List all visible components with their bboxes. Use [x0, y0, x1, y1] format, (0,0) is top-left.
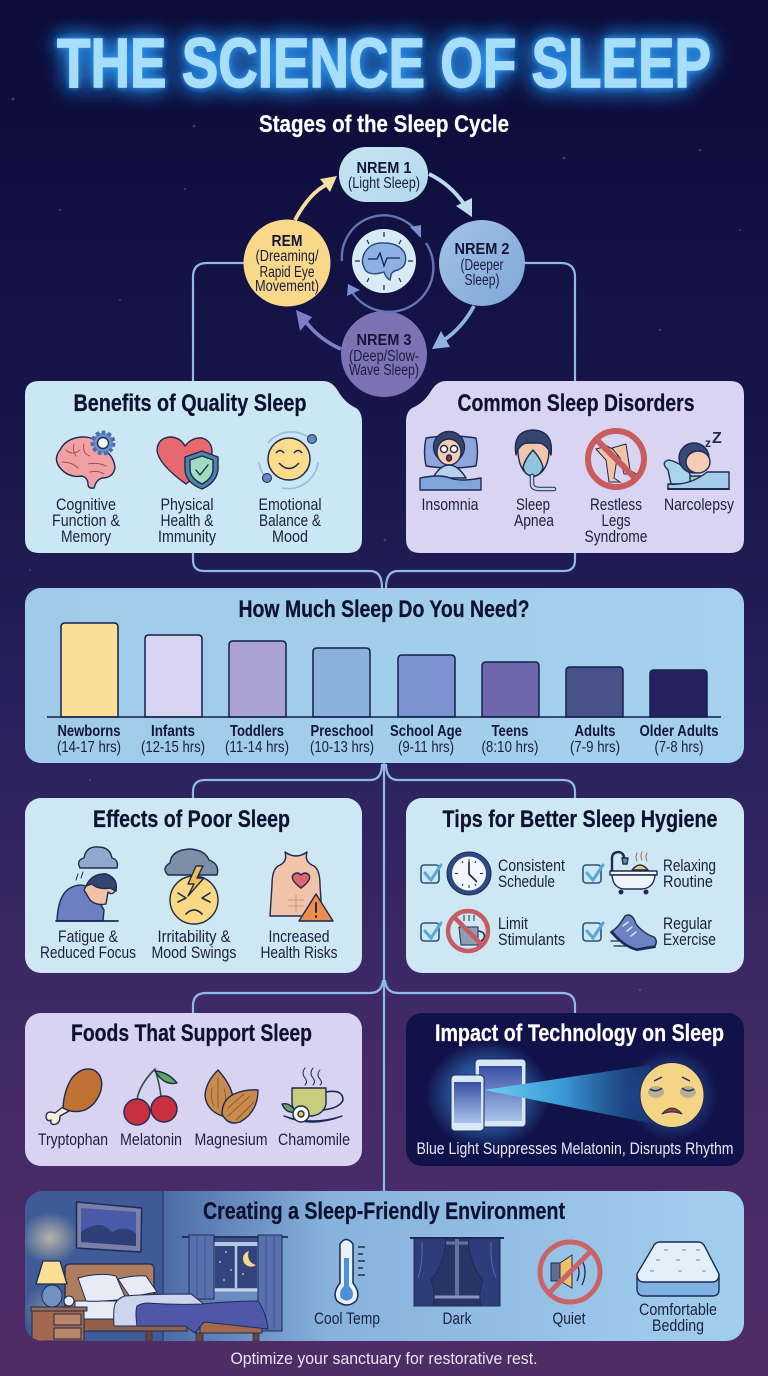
- heading: Creating a Sleep-Friendly Environment: [203, 1198, 565, 1225]
- node: nrem 1: [339, 147, 428, 202]
- bar label: toddlers: Toddlers: [230, 723, 284, 740]
- heading: Common Sleep Disorders: [458, 390, 694, 417]
- label: physical health and immunity: Immunity: [158, 528, 217, 546]
- bar label: preschool: [310, 723, 374, 756]
- label: consistent schedule: Schedule: [498, 873, 555, 891]
- bar label: adults: (7-9 hrs): [570, 739, 620, 756]
- label: increased health risks: Increased: [268, 928, 330, 946]
- label: comfortable bedding: [639, 1301, 717, 1335]
- connectors between panels: [193, 263, 575, 1191]
- icon: fatigued person under cloud: [56, 847, 118, 921]
- label: sleep apnea: Apnea: [514, 512, 555, 530]
- bar label: newborns: Newborns: [58, 723, 121, 740]
- label: physical health and immunity: [158, 496, 217, 546]
- bar label: school age: [390, 723, 462, 756]
- icon: tired face: [640, 1062, 704, 1128]
- label: tryptophan: Tryptophan: [38, 1131, 108, 1149]
- panel: tips for better sleep hygiene: [406, 798, 744, 973]
- panel: creating a sleep-friendly environment: [20, 1191, 744, 1341]
- bar label: infants: Infants: [151, 723, 195, 740]
- label: limit stimulants: [498, 915, 565, 949]
- bar chart: [47, 623, 721, 717]
- bar label: school age: (9-11 hrs): [398, 739, 454, 756]
- label: fatigue and reduced focus: [40, 928, 136, 962]
- bar label: preschool: Preschool: [310, 723, 374, 740]
- node: nrem 1: NREM 1: [356, 160, 412, 177]
- panel: benefits of quality sleep: [25, 381, 362, 553]
- icon: smiley with orbit: [259, 432, 318, 489]
- label: quiet: Quiet: [552, 1310, 586, 1328]
- bar label: preschool: (10-13 hrs): [310, 739, 374, 756]
- icon: tablet: [475, 1059, 526, 1127]
- label: consistent schedule: [498, 857, 565, 891]
- icon: phone: [451, 1075, 484, 1131]
- label: restless legs syndrome: Syndrome: [584, 528, 648, 546]
- panel: common sleep disorders: [406, 381, 744, 553]
- label: magnesium: Magnesium: [194, 1131, 268, 1149]
- label: increased health risks: [260, 928, 338, 962]
- icon: brain with gear: [56, 432, 115, 488]
- icon: sleep apnea mask: [515, 430, 554, 489]
- footer caption: Optimize your sanctuary for restorative rest.: [230, 1349, 538, 1368]
- node: nrem 3: (Deep/Slow-: [349, 348, 419, 365]
- bar label: newborns: (14-17 hrs): [57, 739, 121, 756]
- illustration: bedroom: [20, 1191, 288, 1341]
- icon: restless legs prohibited: [588, 431, 644, 487]
- label: physical health and immunity: Health &: [160, 512, 214, 530]
- label: irritability and mood swings: Mood Swings: [152, 944, 236, 962]
- bar label: toddlers: (11-14 hrs): [225, 739, 289, 756]
- label: melatonin: Melatonin: [120, 1131, 182, 1149]
- bar label: school age: School Age: [390, 723, 462, 740]
- label: emotional balance and mood: Balance &: [259, 512, 321, 530]
- icon: quiet no sound: [540, 1242, 600, 1302]
- bar label: older adults: Older Adults: [640, 723, 719, 740]
- label: cognitive function and memory: Memory: [61, 528, 112, 546]
- node: nrem 3: Wave Sleep): [349, 362, 419, 379]
- label: emotional balance and mood: Mood: [272, 528, 308, 546]
- icon: irritable face with storm: [165, 849, 218, 924]
- icon: no stimulants: [448, 911, 488, 951]
- node: rem: (Dreaming/: [256, 248, 319, 265]
- sleep cycle diagram: [244, 147, 525, 397]
- bar label: teens: [482, 723, 538, 756]
- label: comfortable bedding: Bedding: [652, 1317, 704, 1335]
- node: nrem 1: (Light Sleep): [348, 175, 420, 192]
- icon: thermometer: [335, 1240, 365, 1305]
- label: physical health and immunity: Physical: [160, 496, 214, 514]
- icon: cherries: [124, 1069, 177, 1125]
- bar label: adults: [570, 723, 620, 756]
- label: irritability and mood swings: [152, 928, 236, 962]
- label: relaxing routine: [663, 857, 716, 891]
- label: emotional balance and mood: Emotional: [258, 496, 322, 514]
- label: chamomile: Chamomile: [278, 1131, 350, 1149]
- illustration: blue light beam: [484, 1065, 660, 1125]
- icon: narcolepsy sleeper: [664, 430, 729, 489]
- heading: stages of the sleep cycle: Stages of the Sleep Cycle: [259, 111, 509, 138]
- node: nrem 3: NREM 3: [356, 332, 412, 349]
- bar label: toddlers: [225, 723, 289, 756]
- label: restless legs syndrome: [584, 496, 648, 546]
- label: increased health risks: Health Risks: [260, 944, 338, 962]
- label: insomnia: Insomnia: [422, 496, 479, 514]
- icon: clock: [447, 852, 491, 895]
- icon: checkboxes: [421, 865, 603, 941]
- label: regular exercise: Regular: [663, 915, 712, 933]
- label: restless legs syndrome: Legs: [602, 512, 630, 530]
- label: limit stimulants: Stimulants: [498, 931, 565, 949]
- bar label: infants: [141, 723, 205, 756]
- icon: sad tired face glow: [626, 1049, 718, 1141]
- label: consistent schedule: Consistent: [498, 857, 565, 875]
- icon: chicken leg: [46, 1069, 102, 1124]
- icon: heart with shield: [157, 437, 218, 489]
- heading: Effects of Poor Sleep: [93, 806, 290, 833]
- label: dark: Dark: [442, 1310, 472, 1328]
- icon: insomnia: [420, 432, 481, 490]
- label: limit stimulants: Limit: [498, 915, 528, 933]
- node: nrem 3: [341, 311, 427, 397]
- icon: running shoe: [611, 915, 656, 950]
- label: comfortable bedding: Comfortable: [639, 1301, 717, 1319]
- label: narcolepsy: Narcolepsy: [664, 496, 735, 514]
- icon: mattress: [637, 1242, 719, 1296]
- label: sleep apnea: Sleep: [516, 496, 550, 514]
- bar label: teens: Teens: [492, 723, 529, 740]
- icon: almonds: [205, 1070, 258, 1123]
- node: nrem 2: (Deeper: [460, 257, 504, 274]
- bar label: adults: Adults: [574, 723, 616, 740]
- label: relaxing routine: Routine: [663, 873, 713, 891]
- icon: narcolepsy sleeper: z: [705, 436, 711, 450]
- node: rem: REM: [272, 233, 302, 250]
- bar label: older adults: (7-8 hrs): [654, 739, 704, 756]
- heading: How Much Sleep Do You Need?: [238, 596, 530, 623]
- heading: Foods That Support Sleep: [71, 1020, 312, 1047]
- label: sleep apnea: [514, 496, 555, 530]
- arrow: nrem 1 to nrem 2: [429, 174, 472, 217]
- label: regular exercise: [663, 915, 716, 949]
- heading: Tips for Better Sleep Hygiene: [442, 806, 718, 833]
- node: rem: [244, 220, 330, 306]
- panel: impact of technology on sleep: [406, 1013, 744, 1166]
- label: fatigue and reduced focus: Reduced Focus: [40, 944, 136, 962]
- icon: narcolepsy sleeper: Z: [712, 430, 722, 447]
- panel: effects of poor sleep: [25, 798, 362, 973]
- label: cognitive function and memory: Function &: [52, 512, 120, 530]
- label: cool temp: Cool Temp: [314, 1310, 380, 1328]
- icon: bathtub: [610, 852, 657, 894]
- illustration: devices glow: [426, 1041, 550, 1149]
- bar label: infants: (12-15 hrs): [141, 739, 205, 756]
- arrow: nrem 3 to rem: [296, 310, 341, 349]
- node: nrem 2: [439, 220, 525, 306]
- label: cognitive function and memory: Cognitive: [56, 496, 116, 514]
- bar label: newborns: [57, 723, 121, 756]
- icon: brain clock: [342, 215, 433, 312]
- icon: chamomile tea: [282, 1068, 343, 1122]
- arrow: nrem 2 to nrem 3: [432, 306, 474, 349]
- bar label: teens: (8:10 hrs): [482, 739, 538, 756]
- icon: torso with warning: [270, 852, 333, 921]
- label: fatigue and reduced focus: Fatigue &: [58, 928, 118, 946]
- icon: dark window with curtains: [410, 1238, 504, 1306]
- node: rem: Rapid Eye: [260, 264, 314, 281]
- node: nrem 2: NREM 2: [454, 241, 510, 258]
- node: nrem 2: Sleep): [464, 272, 500, 289]
- label: irritability and mood swings: Irritability &: [158, 928, 230, 946]
- panel: how much sleep do you need: [25, 588, 744, 763]
- panel: foods that support sleep: [25, 1013, 362, 1166]
- label: restless legs syndrome: Restless: [590, 496, 642, 514]
- label: emotional balance and mood: [258, 496, 322, 546]
- heading: Benefits of Quality Sleep: [74, 390, 306, 417]
- bar label: older adults: [640, 723, 719, 756]
- label: regular exercise: Exercise: [663, 931, 716, 949]
- label: cognitive function and memory: [52, 496, 120, 546]
- arrow: rem to nrem 1: [295, 176, 337, 220]
- label: relaxing routine: Relaxing: [663, 857, 716, 875]
- node: rem: Movement): [255, 278, 319, 295]
